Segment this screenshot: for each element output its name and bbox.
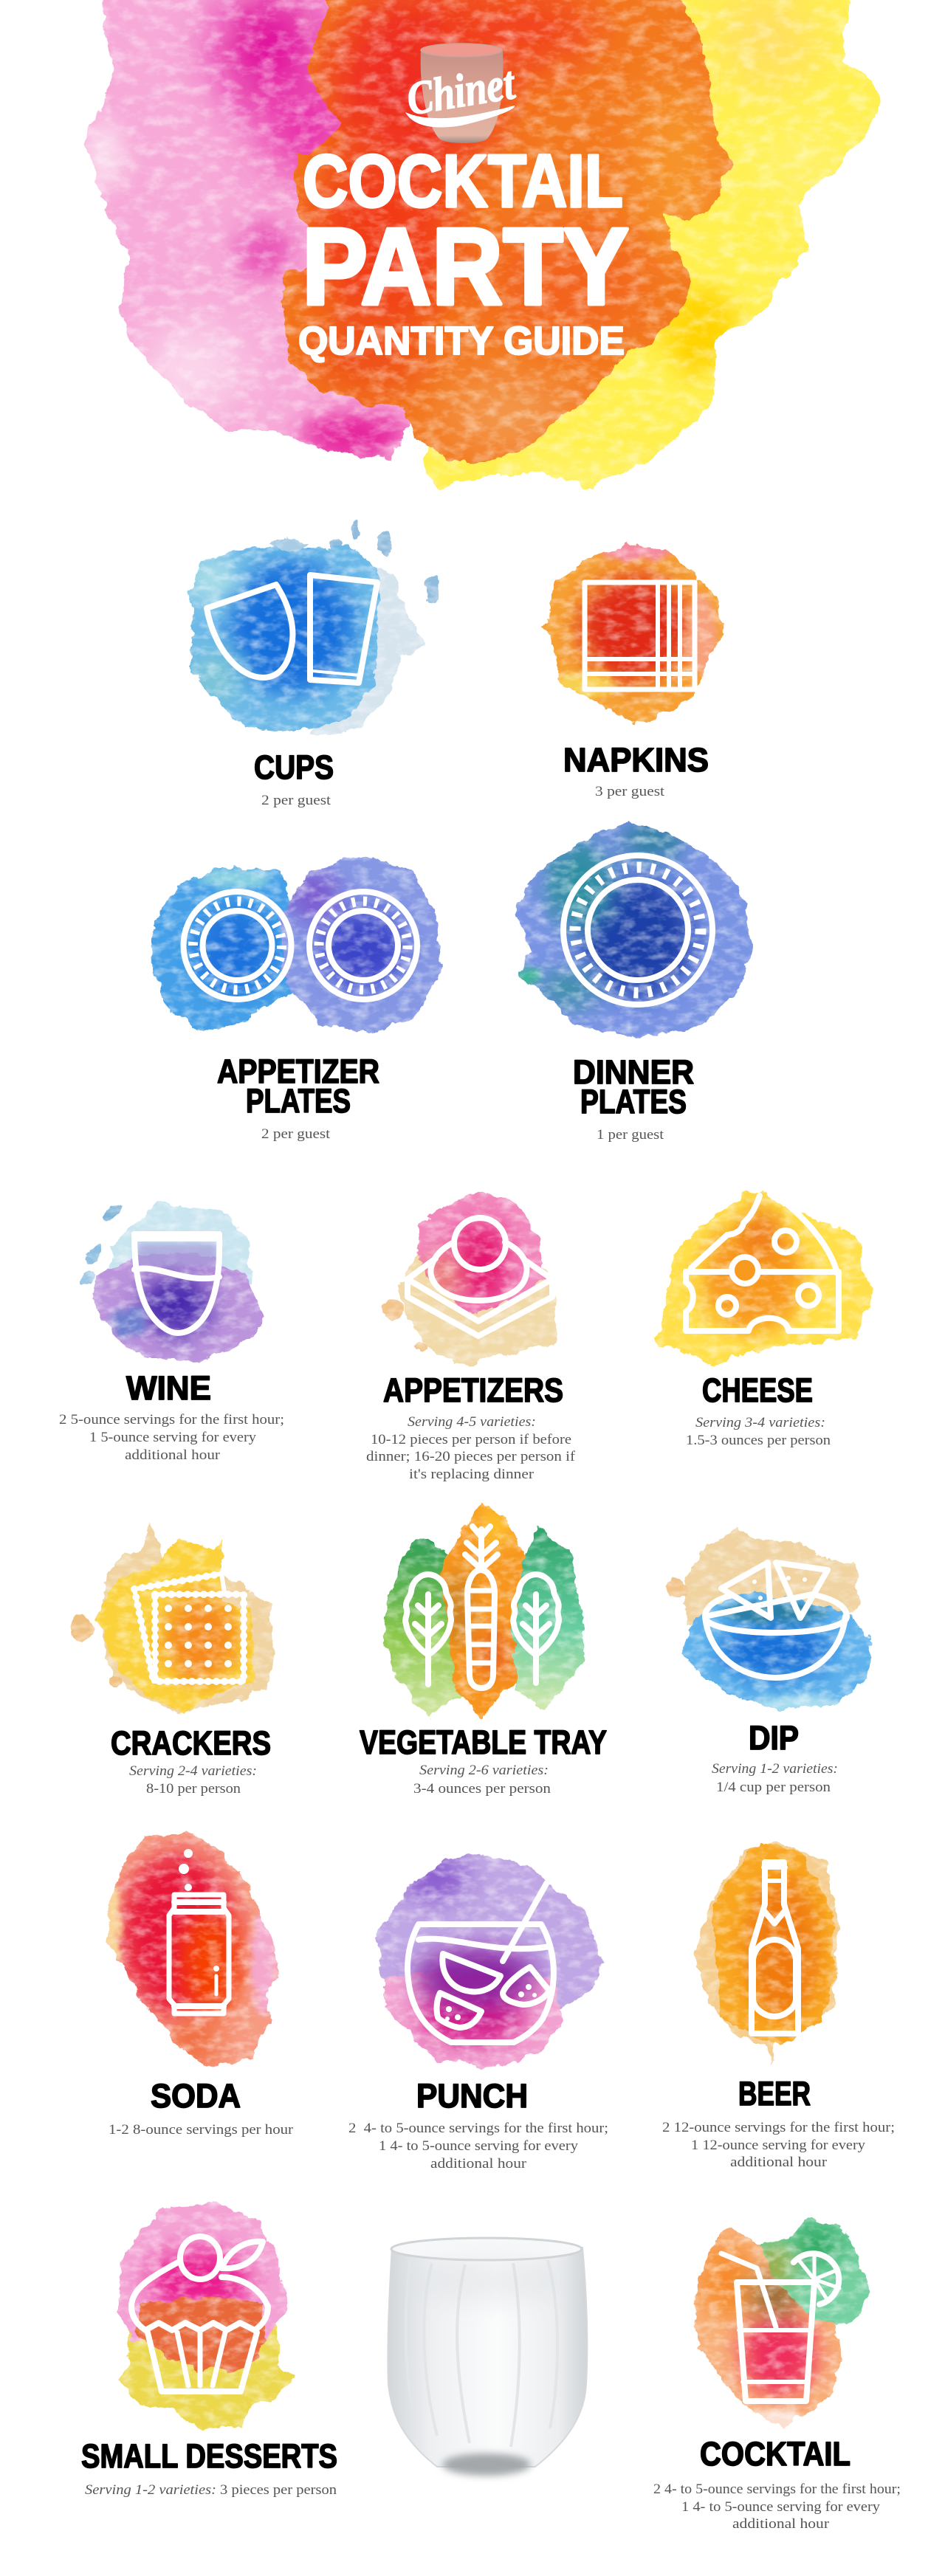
icon: appetizer plates bbox=[151, 855, 441, 1033]
icon: napkin bbox=[545, 540, 724, 723]
serving text: Serving 1-2 varieties: bbox=[712, 1761, 838, 1777]
serving text bbox=[59, 1412, 284, 1463]
serving text bbox=[712, 1761, 838, 1795]
serving text: Serving 1-2 varieties: 3 pieces per person bbox=[85, 2482, 337, 2498]
panel: wine bbox=[59, 1202, 284, 1463]
heading bbox=[573, 1053, 694, 1120]
quantity text: 3 per guest bbox=[595, 784, 665, 799]
title line: quantity guide: QUANTITY GUIDE bbox=[298, 319, 625, 363]
serving text bbox=[413, 1763, 551, 1797]
serving text: 1 12-ounce serving for every bbox=[691, 2138, 866, 2153]
panel: appetizer plates bbox=[151, 855, 441, 1142]
serving text: dinner; 16-20 pieces per person if bbox=[366, 1449, 576, 1464]
serving text: 8-10 per person bbox=[146, 1781, 241, 1797]
panel: cups bbox=[185, 519, 440, 808]
serving text: 2 5-ounce servings for the first hour; bbox=[59, 1412, 284, 1428]
icon: dinner plate bbox=[514, 821, 753, 1038]
serving text: 10-12 pieces per person if before bbox=[371, 1432, 571, 1447]
title line: party: PARTY bbox=[302, 206, 629, 328]
serving text: additional hour bbox=[125, 1447, 221, 1463]
serving text: additional hour bbox=[430, 2156, 527, 2172]
bubbles bbox=[179, 1849, 219, 1971]
serving text: Serving 2-6 varieties: bbox=[419, 1763, 549, 1778]
serving text: 2 4- to 5-ounce servings for the first hour; bbox=[348, 2121, 608, 2136]
serving text: 1.5-3 ounces per person bbox=[686, 1433, 831, 1448]
heading: APPETIZERS bbox=[383, 1371, 563, 1409]
panel: header bbox=[74, 0, 901, 495]
serving text bbox=[348, 2121, 608, 2172]
icon: cupcake bbox=[118, 2205, 295, 2428]
serving text: 2 12-ounce servings for the first hour; bbox=[662, 2120, 895, 2135]
heading: WINE bbox=[126, 1369, 211, 1407]
heading: CUPS bbox=[254, 748, 334, 786]
serving text: Serving 3-4 varieties: bbox=[695, 1415, 825, 1430]
panel: soda bbox=[100, 1832, 294, 2138]
logo: Chinet bbox=[403, 44, 519, 143]
watercolor: pink wash bbox=[84, 0, 410, 461]
icon: punch bowl bbox=[377, 1853, 604, 2069]
panel: cocktail bbox=[653, 2217, 901, 2532]
serving text: additional hour bbox=[730, 2155, 828, 2170]
heading: SODA bbox=[151, 2077, 241, 2115]
wine band bbox=[137, 1243, 218, 1267]
heading: CHEESE bbox=[702, 1371, 813, 1409]
panel: dip bbox=[665, 1524, 871, 1795]
panel: appetizers bbox=[366, 1190, 576, 1482]
citrus pulp bbox=[445, 1984, 537, 2021]
panel: vegetable tray bbox=[360, 1502, 607, 1797]
serving text: additional hour bbox=[732, 2516, 830, 2532]
punch liquid bbox=[416, 1949, 537, 2008]
serving text: 3-4 ounces per person bbox=[413, 1781, 551, 1797]
watercolor: orange wash bbox=[273, 0, 746, 465]
heading: PLATES bbox=[580, 1083, 687, 1120]
heading: PLATES bbox=[246, 1082, 351, 1120]
heading bbox=[217, 1053, 379, 1120]
logo swoosh bbox=[405, 106, 515, 128]
icon: vegetables bbox=[383, 1502, 585, 1718]
panel: beer bbox=[662, 1842, 895, 2170]
icon: soda can bbox=[100, 1832, 279, 2067]
panel: small desserts bbox=[81, 2205, 337, 2498]
serving text: 1 4- to 5-ounce serving for every bbox=[379, 2138, 579, 2154]
heading: PUNCH bbox=[416, 2077, 528, 2115]
heading: DINNER bbox=[573, 1053, 694, 1091]
quantity text: 1 per guest bbox=[597, 1127, 664, 1143]
serving text: 1 4- to 5-ounce serving for every bbox=[681, 2499, 881, 2515]
logo glass bbox=[421, 44, 504, 143]
serving text: Serving 2-4 varieties: bbox=[129, 1763, 257, 1779]
icon: crackers bbox=[71, 1522, 274, 1712]
serving text: it's replacing dinner bbox=[409, 1467, 535, 1482]
title line: cocktail: COCKTAIL bbox=[303, 140, 623, 223]
serving text bbox=[653, 2482, 901, 2532]
title bbox=[298, 140, 629, 363]
panel: napkins bbox=[545, 540, 724, 799]
serving text: 1 5-ounce serving for every bbox=[89, 1430, 257, 1445]
quantity text: 2 per guest bbox=[261, 793, 331, 808]
serving text bbox=[129, 1763, 257, 1797]
icon: cups bbox=[185, 519, 440, 734]
panel: dinner plates bbox=[514, 821, 753, 1143]
logo wordmark: Chinet bbox=[403, 56, 519, 125]
product photo: plastic tumbler bbox=[388, 2238, 587, 2476]
serving text bbox=[662, 2120, 895, 2170]
heading: BEER bbox=[738, 2075, 811, 2112]
heading: VEGETABLE TRAY bbox=[360, 1723, 607, 1761]
icon: wine glass bbox=[79, 1202, 263, 1362]
heading: DIP bbox=[749, 1719, 799, 1757]
cracker holes bbox=[165, 1605, 232, 1667]
icon: cheese bbox=[657, 1192, 874, 1367]
serving text bbox=[686, 1415, 831, 1448]
quantity text: 2 per guest bbox=[261, 1126, 331, 1142]
serving text: 1-2 8-ounce servings per hour bbox=[109, 2122, 294, 2138]
serving text: 2 4- to 5-ounce servings for the first hour; bbox=[653, 2482, 901, 2497]
panel: crackers bbox=[71, 1522, 274, 1797]
icon: beer bottle bbox=[694, 1842, 838, 2064]
watercolor: yellow wash bbox=[413, 0, 901, 495]
icon: cocktail bbox=[694, 2217, 869, 2433]
icon: dip bowl bbox=[665, 1524, 871, 1715]
chip dots bbox=[752, 1576, 807, 1600]
heading: COCKTAIL bbox=[700, 2435, 850, 2473]
heading: APPETIZER bbox=[217, 1053, 379, 1090]
panel: punch bbox=[348, 1853, 608, 2172]
heading: SMALL DESSERTS bbox=[81, 2437, 337, 2475]
serving text: 1/4 cup per person bbox=[716, 1780, 831, 1795]
heading: NAPKINS bbox=[563, 741, 709, 779]
icon: appetizers bbox=[383, 1190, 557, 1366]
serving text bbox=[366, 1414, 576, 1482]
serving text: Serving 4-5 varieties: bbox=[408, 1414, 536, 1430]
heading: CRACKERS bbox=[111, 1724, 271, 1762]
panel: cheese bbox=[657, 1192, 874, 1448]
